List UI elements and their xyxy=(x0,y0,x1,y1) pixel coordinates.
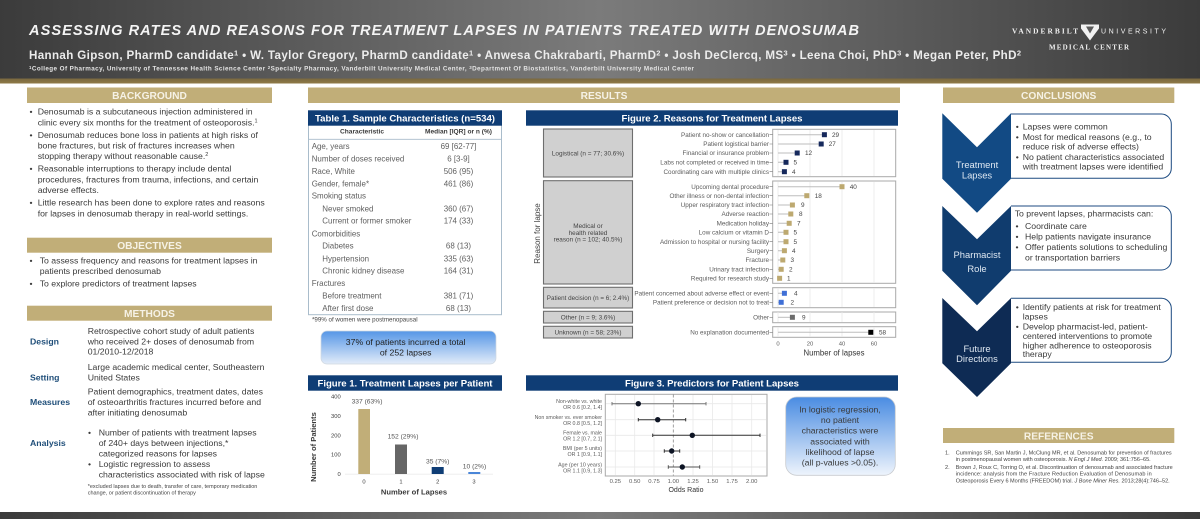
method: design xyxy=(30,326,255,357)
text box: pharmacist role: • xyxy=(1016,221,1019,231)
forest plot: odds ratios: OR 1.1 [0.9, 1.3] xyxy=(563,468,603,474)
panel: methods xyxy=(27,306,272,497)
forest plot: odds ratios: 1.00 xyxy=(668,479,680,485)
chart panel: patient decision: 4 xyxy=(794,290,798,297)
chart panel: logistical: Coordinating care with multiple clinics xyxy=(663,169,769,176)
forest plot: odds ratios: 0.75 xyxy=(648,479,660,485)
heading: background: BACKGROUND xyxy=(112,91,187,102)
bar chart: lapses per patient: 2 xyxy=(436,480,439,486)
method: analysis: Analysis xyxy=(30,438,66,448)
chart panel: medical or health related: Low calcium or vitamin D xyxy=(699,229,769,236)
chart panel: medical or health related: Admission to hospital or nursing facility xyxy=(660,239,770,246)
text box: future directions xyxy=(1011,298,1171,362)
bar chart: lapses per patient: 10 (2%) xyxy=(463,464,486,471)
affiliations: 3 xyxy=(469,65,472,70)
bar chart: lapses per patient: 1 xyxy=(399,480,403,486)
bullet list: objectives xyxy=(30,255,258,288)
method: design: Retrospective cohort study of adult patients xyxy=(88,326,255,336)
table rows: Race, White xyxy=(312,167,356,176)
chart panel: medical or health related: 7 xyxy=(797,220,801,227)
chart panel: logistical: Financial or insurance problem xyxy=(682,150,769,157)
chart panel: medical or health related: 18 xyxy=(815,193,822,200)
table rows: 335 (63) xyxy=(444,254,474,263)
method: setting: United States xyxy=(88,373,141,383)
forest plot: odds ratios: OR 0.8 [0.5, 1.2] xyxy=(563,421,603,427)
table rows: Smoking status xyxy=(312,192,366,201)
method: analysis xyxy=(30,428,265,480)
text box: treatment lapses: No patient characteristics associated xyxy=(1023,152,1164,162)
method: measures: Patient demographics, treatment dates, dates xyxy=(88,387,264,397)
chevron: pharmacist role: Pharmacist xyxy=(954,249,1001,260)
authors: • Leena Choi, PhD xyxy=(788,49,897,62)
chart panel: logistical: Labs not completed or received in time xyxy=(660,159,769,166)
heading: references xyxy=(943,428,1174,443)
text box: pharmacist role: Offer patients solutions to scheduling xyxy=(1025,242,1167,252)
method: analysis: • xyxy=(88,428,91,438)
table rows: Number of doses received xyxy=(312,154,404,163)
x axis: number of lapses: Number of lapses xyxy=(803,348,865,358)
footnote: table: *99% of women were postmenopausal xyxy=(312,317,418,324)
forest plot: odds ratios: 0.50 xyxy=(629,479,641,485)
method: analysis: categorized reasons for lapses xyxy=(99,449,218,459)
bullet list: background: Denosumab reduces bone loss in patients at high risks of xyxy=(38,130,258,140)
chart panel: medical or health related: Upper respiratory tract infection xyxy=(681,202,769,209)
callout: logistic regression xyxy=(786,397,895,475)
table rows: Diabetes xyxy=(322,242,354,251)
table rows: 360 (67) xyxy=(444,204,474,213)
figure 1 heading: Figure 1. Treatment Lapses per Patient xyxy=(318,378,493,390)
bar chart: lapses per patient: 35 (7%) xyxy=(426,459,449,466)
text box: future directions: centered interventions to promote xyxy=(1023,331,1152,341)
footnote: methods xyxy=(88,484,257,497)
table column headers xyxy=(308,128,502,139)
authors: 1 xyxy=(234,48,238,58)
chart panel: patient decision: 2 xyxy=(790,299,794,306)
table title xyxy=(308,110,502,126)
figure 3 heading: Figure 3. Predictors for Patient Lapses xyxy=(625,378,799,390)
reference list xyxy=(945,451,1173,485)
panel: background xyxy=(27,88,272,218)
chart panel: patient decision xyxy=(634,288,896,308)
forest plot: odds ratios: Female vs. male xyxy=(563,431,602,437)
authors: • Josh DeClercq, MS xyxy=(661,49,783,62)
chart panel: medical or health related: 4 xyxy=(792,248,796,255)
category boxes: Unknown (n = 58; 23%) xyxy=(555,329,621,336)
heading: conclusions xyxy=(943,88,1174,103)
chart panel: other xyxy=(753,312,896,323)
text box: pharmacist role: To prevent lapses, pharmacists can: xyxy=(1015,209,1153,219)
forest plot: odds ratios: 1.75 xyxy=(726,479,738,485)
text box: future directions: higher adherence to osteoporosis xyxy=(1023,340,1152,350)
bar chart: lapses per patient: 337 (63%) xyxy=(352,399,382,406)
reference list: 1. xyxy=(945,451,950,457)
chart panel: unknown xyxy=(690,327,896,337)
table rows: 6 [3-9] xyxy=(447,154,470,163)
method: design: 01/2010-12/2018 xyxy=(88,347,154,357)
table rows: Never smoked xyxy=(322,204,373,213)
authors: 1 xyxy=(469,48,473,58)
chart panel: logistical: 5 xyxy=(794,159,798,166)
forest plot: odds ratios: Age (per 10 years) xyxy=(558,462,602,468)
text box: pharmacist role: or transportation barriers xyxy=(1025,253,1121,263)
bullet list: background xyxy=(30,107,265,218)
bar chart: lapses per patient: 0 xyxy=(337,472,341,478)
chart panel: logistical: 29 xyxy=(832,132,840,139)
table rows: 164 (31) xyxy=(444,267,474,276)
callout: logistic regression: (all p-values >0.05). xyxy=(802,457,878,467)
table rows: 69 [62-77] xyxy=(441,142,476,151)
callout: 37% of patients xyxy=(321,331,496,364)
forest plot: odds ratios: 1.50 xyxy=(707,479,719,485)
bullet list: background: • xyxy=(30,107,33,117)
text box: treatment lapses xyxy=(1011,114,1171,178)
callout: logistic regression: no patient xyxy=(821,415,860,425)
method: analysis: Number of patients with treatment lapses xyxy=(99,428,257,438)
chart panel: medical or health related: 2 xyxy=(789,266,793,273)
heading: objectives xyxy=(27,238,272,253)
chevron: future directions xyxy=(942,298,1011,397)
heading: conclusions: CONCLUSIONS xyxy=(1021,91,1097,102)
panel: references xyxy=(943,428,1174,485)
chart panel: medical or health related: 5 xyxy=(794,229,798,236)
bullet list: objectives: To explore predictors of treatment lapses xyxy=(40,278,197,288)
method: setting: Large academic medical center, Southeastern xyxy=(88,362,265,372)
chevron: treatment lapses: Treatment xyxy=(956,159,999,170)
bar chart: lapses per patient: 300 xyxy=(331,414,341,420)
affiliations: Specialty Pharmacy, Vanderbilt University Medical Center, xyxy=(271,66,469,72)
bullet list: background: procedures, fractures from trauma, infections, and certain xyxy=(38,174,259,184)
chevron: pharmacist role: Role xyxy=(967,263,987,274)
authors: 3 xyxy=(897,48,901,58)
authors: • Megan Peter, PhD xyxy=(902,49,1016,62)
chevron: treatment lapses: Lapses xyxy=(962,170,992,180)
panel: figure 1 xyxy=(308,375,502,496)
chart panel: medical or health related: 5 xyxy=(794,239,798,246)
bullet list: background: stopping therapy without reasonable cause. xyxy=(38,151,205,161)
footnote: methods: change, or patient discontinuation of therapy xyxy=(88,491,196,497)
text box: future directions: Develop pharmacist-led, patient- xyxy=(1023,322,1148,332)
bar chart: lapses per patient: 200 xyxy=(331,433,341,439)
logo: Vanderbilt University Medical Center xyxy=(1012,24,1166,52)
forest plot: odds ratios: BMI (per 5 units) xyxy=(563,446,602,452)
table title: Table 1. Sample Characteristics (n=534) xyxy=(315,114,495,124)
forest plot: odds ratios: OR 1.2 [0.7, 2.1] xyxy=(563,437,603,443)
bullet list: background: • xyxy=(30,164,33,174)
y axis title: Reason for lapse xyxy=(533,203,542,264)
chart panel: medical or health related: Required for research study xyxy=(691,275,770,282)
method: design: Design xyxy=(30,336,59,346)
table rows: 68 (13) xyxy=(446,304,471,313)
reference list: incidence: analysis from the Fracture Reduction Evaluation of Denosumab in xyxy=(956,472,1152,478)
category boxes: Medical or xyxy=(573,223,604,230)
x axis: number of lapses: 0 xyxy=(776,342,780,348)
chevron: future directions: Directions xyxy=(956,353,998,364)
method: analysis: • xyxy=(88,459,91,469)
x axis: number of lapses xyxy=(776,342,878,358)
reference list: Osteoporosis Every 6 Months (FREEDOM) trial. J Bone Miner Res. 2013;28(4):746–52. xyxy=(956,479,1170,485)
table rows: 461 (86) xyxy=(444,179,474,188)
table column headers: Characteristic xyxy=(340,128,384,136)
x axis: number of lapses: 20 xyxy=(807,342,814,348)
text box: treatment lapses: • xyxy=(1016,152,1019,162)
category boxes xyxy=(544,129,632,338)
bullet list: background: • xyxy=(30,130,33,140)
forest plot: odds ratios xyxy=(535,394,767,494)
category boxes: health related xyxy=(569,230,608,237)
text box: future directions: therapy xyxy=(1023,349,1052,359)
text box: future directions: lapses xyxy=(1023,311,1048,321)
affiliations: 1 xyxy=(29,65,32,70)
table: sample characteristics xyxy=(308,110,502,315)
chart panel: medical or health related: Medication holiday xyxy=(717,220,770,227)
method: setting xyxy=(30,362,265,383)
chart panel: medical or health related: Upcoming dental procedure xyxy=(691,184,769,191)
heading: results xyxy=(308,88,900,103)
heading: methods xyxy=(27,306,272,321)
text box: treatment lapses: Lapses were common xyxy=(1023,122,1108,132)
chart panel: medical or health related: Fracture xyxy=(745,257,769,264)
bar chart: lapses per patient: Number of Lapses xyxy=(381,488,447,496)
bullet list: background: adverse effects. xyxy=(38,185,99,195)
forest plot: odds ratios: 2.00 xyxy=(746,479,758,485)
heading: methods: METHODS xyxy=(124,309,175,320)
text box: pharmacist role: • xyxy=(1016,232,1019,242)
callout: logistic regression: associated with xyxy=(810,436,870,446)
bullet list: background: bone fractures, but risk of fractures increases when xyxy=(38,141,235,151)
table rows: 68 (13) xyxy=(446,242,471,251)
table rows: Fractures xyxy=(312,279,345,288)
bullet list: objectives: To assess frequency and reasons for treatment lapses in xyxy=(40,255,258,265)
bullet list: background: Reasonable interruptions to therapy include dental xyxy=(38,164,231,174)
method: measures: after initiating denosumab xyxy=(88,408,187,418)
text box: future directions: • xyxy=(1016,302,1019,312)
chart panel: logistical: 27 xyxy=(829,141,836,148)
logo: Vanderbilt University Medical Center: MEDICAL CENTER xyxy=(1049,44,1130,52)
authors: 3 xyxy=(783,48,788,58)
bullet list: background: Little research has been done to explore rates and reasons xyxy=(38,198,265,208)
chart panel: unknown: 58 xyxy=(879,329,887,336)
method: analysis: of 240+ days between injections,* xyxy=(99,438,229,448)
text box: pharmacist role: Help patients navigate insurance xyxy=(1025,232,1151,242)
forest plot: odds ratios: Non-white vs. white xyxy=(556,399,602,405)
reference list: in postmenopausal women with osteoporosis. N Engl J Med. 2009; 361:756–65. xyxy=(956,457,1151,463)
category boxes: reason (n = 102; 40.5%) xyxy=(554,237,622,244)
affiliations: 2 xyxy=(268,65,271,70)
chart panel: medical or health related: 9 xyxy=(801,202,805,209)
callout: 37% of patients: 37% of patients incurred a total xyxy=(346,337,466,347)
table rows: Hypertension xyxy=(322,254,369,263)
forest plot: odds ratios: Non smoker vs. ever smoker xyxy=(535,415,602,421)
bullet list: background: • xyxy=(30,198,33,208)
text box: pharmacist role xyxy=(1011,206,1171,270)
table rows: Current or former smoker xyxy=(322,217,412,226)
logo: Vanderbilt University Medical Center: UNIVERSITY xyxy=(1101,28,1166,36)
table rows: 381 (71) xyxy=(444,292,474,301)
text box: future directions: • xyxy=(1016,322,1019,332)
callout: logistic regression: In logistic regression, xyxy=(799,404,881,414)
method: measures xyxy=(30,387,264,418)
figure 3 heading xyxy=(526,375,898,391)
chart panel: logistical: Patient logistical barrier xyxy=(703,141,769,148)
footnote: methods: *excluded lapses due to death, transfer of care, temporary medication xyxy=(88,484,257,490)
forest plot: odds ratios: OR 1 [0.9, 1.1] xyxy=(568,452,603,458)
bullet list: background: Denosumab is a subcutaneous injection administered in xyxy=(38,107,253,117)
bullet list: background: for lapses in denosumab therapy in real-world settings. xyxy=(38,208,248,218)
poster header xyxy=(0,0,1200,84)
chart panel: logistical: 4 xyxy=(792,169,796,176)
method: setting: Setting xyxy=(30,373,59,383)
logo: Vanderbilt University Medical Center: VANDERBILT xyxy=(1012,26,1078,36)
chart panel: unknown: No explanation documented xyxy=(690,329,769,336)
reference list: Cummings SR, San Martin J, McClung MR, et al. Denosumab for prevention of fractures xyxy=(956,451,1172,457)
affiliations: Department Of Biostatistics, Vanderbilt University Medical Center xyxy=(472,66,695,72)
reference list: Brown J, Roux C, Torring O, et al. Discontinuation of denosumab and associated fracture xyxy=(956,465,1173,471)
chart panel: logistical: 12 xyxy=(805,150,813,157)
figure 1 heading xyxy=(308,375,502,391)
x axis: number of lapses: 40 xyxy=(839,342,846,348)
bar chart: lapses per patient: 3 xyxy=(472,480,476,486)
bar chart: lapses per patient: 400 xyxy=(331,395,341,401)
bullet list: background: clinic every six months for the treatment of osteoporosis. xyxy=(38,117,255,127)
bar chart: lapses per patient xyxy=(309,395,493,496)
bullet list: objectives: • xyxy=(30,255,33,265)
text box: treatment lapses: • xyxy=(1016,122,1019,132)
chart panel: medical or health related: Surgery xyxy=(747,248,770,255)
heading: references: REFERENCES xyxy=(1024,431,1094,442)
bar chart: lapses per patient: 0 xyxy=(362,480,366,486)
bullet list: background: 2 xyxy=(205,152,208,158)
bullet list: objectives: • xyxy=(30,278,33,288)
text box: treatment lapses: • xyxy=(1016,132,1019,142)
title: ASSESSING RATES AND REASONS FOR TREATMENT LAPSES IN PATIENTS TREATED WITH DENOSUMAB xyxy=(28,23,859,39)
bullet list: background: 1 xyxy=(255,118,258,124)
callout: 37% of patients: of 252 lapses xyxy=(380,348,432,358)
chart panel: medical or health related: Urinary tract infection xyxy=(709,266,769,273)
callout: logistic regression: likelihood of lapse xyxy=(805,447,875,457)
forest plot: odds ratios: 1.25 xyxy=(687,479,699,485)
panel: objectives xyxy=(27,238,272,288)
table rows: 174 (33) xyxy=(444,217,474,226)
forest plot: odds ratios: OR 0.6 [0.2, 1.4] xyxy=(563,405,603,411)
panel: figure 3 xyxy=(526,375,898,494)
chart panel: patient decision: Patient concerned about adverse effect or event xyxy=(634,290,769,297)
footer bar xyxy=(0,512,1200,519)
chart panel: other: Other xyxy=(753,314,769,321)
text box: treatment lapses: with treatment lapses were identified xyxy=(1022,162,1163,172)
panel: figure 2 xyxy=(526,110,898,358)
chart panel: medical or health related: 3 xyxy=(790,257,794,264)
category boxes: Logistical (n = 77; 30.6%) xyxy=(552,150,624,158)
method: analysis: characteristics associated with risk of lapse xyxy=(99,470,265,480)
text box: pharmacist role: Coordinate care xyxy=(1025,221,1087,231)
affiliations: College Of Pharmacy, University of Tennessee Health Science Center xyxy=(32,66,267,72)
chart panel: other: 9 xyxy=(802,314,806,321)
bar chart: lapses per patient: Number of Patients xyxy=(309,412,318,482)
text box: future directions: Identify patients at risk for treatment xyxy=(1023,302,1161,312)
authors: • Anwesa Chakrabarti, PharmD xyxy=(474,49,656,62)
chart panel: medical or health related xyxy=(660,181,896,283)
heading: background xyxy=(27,88,272,103)
table rows: 506 (95) xyxy=(444,167,474,176)
table column headers: Median [IQR] or n (%) xyxy=(425,128,492,136)
reference list: 2. xyxy=(945,465,950,471)
method: design: who received 2+ doses of denosumab from xyxy=(87,336,254,346)
figure 2 heading xyxy=(526,110,898,126)
chevron: treatment lapses xyxy=(942,113,1011,213)
table rows: Age, years xyxy=(312,142,350,151)
method: measures: of osteoarthritis fractures incurred before and xyxy=(88,397,261,407)
table rows: Gender, female* xyxy=(312,179,369,188)
chart panel: patient decision: Patient preference or decision not to treat xyxy=(653,299,769,306)
authors: 2 xyxy=(656,48,660,58)
heading: results: RESULTS xyxy=(581,91,628,102)
table rows: After first dose xyxy=(322,304,374,313)
method: analysis: Logistic regression to assess xyxy=(99,459,211,469)
chart panel: logistical xyxy=(660,129,896,177)
chart panel: medical or health related: Adverse reaction xyxy=(722,211,769,218)
authors: Hannah Gipson, PharmD candidate xyxy=(29,49,234,62)
bar chart: lapses per patient: 152 (29%) xyxy=(388,434,418,441)
text box: treatment lapses: Most for medical reasons (e.g., to xyxy=(1023,132,1152,142)
heading: objectives: OBJECTIVES xyxy=(117,241,182,252)
chevron: future directions: Future xyxy=(963,343,991,354)
bar chart: lapses per patient: 100 xyxy=(331,453,341,459)
chart panel: medical or health related: 1 xyxy=(787,275,791,282)
table rows xyxy=(312,142,476,313)
category boxes: Other (n = 9; 3.6%) xyxy=(561,314,615,321)
bullet list: objectives: patients prescribed denosumab xyxy=(40,266,161,276)
table rows: Comorbidities xyxy=(312,229,360,238)
authors: 2 xyxy=(1017,48,1021,58)
table rows: Before treatment xyxy=(322,292,382,301)
figure 2 heading: Figure 2. Reasons for Treatment Lapses xyxy=(622,114,802,124)
method: measures: Measures xyxy=(30,397,70,407)
chart panel: logistical: Patient no-show or cancellation xyxy=(681,132,769,139)
chart panel: medical or health related: 40 xyxy=(850,184,857,191)
table rows: Chronic kidney disease xyxy=(322,267,405,276)
forest plot: odds ratios: Odds Ratio xyxy=(668,487,704,494)
forest plot: odds ratios: 0.25 xyxy=(610,479,622,485)
callout: logistic regression: characteristics were xyxy=(802,426,879,436)
authors: • W. Taylor Gregory, PharmD candidate xyxy=(239,49,469,62)
panel: conclusions xyxy=(942,88,1174,397)
text box: pharmacist role: • xyxy=(1016,242,1019,252)
text box: treatment lapses: reduce risk of adverse effects) xyxy=(1023,141,1139,151)
chevron: pharmacist role xyxy=(942,206,1011,305)
chart panel: medical or health related: 8 xyxy=(799,211,803,218)
x axis: number of lapses: 60 xyxy=(871,342,878,348)
chart panel: medical or health related: Other illness or non-dental infection xyxy=(669,193,769,200)
category boxes: Patient decision (n = 6; 2.4%) xyxy=(547,295,629,302)
